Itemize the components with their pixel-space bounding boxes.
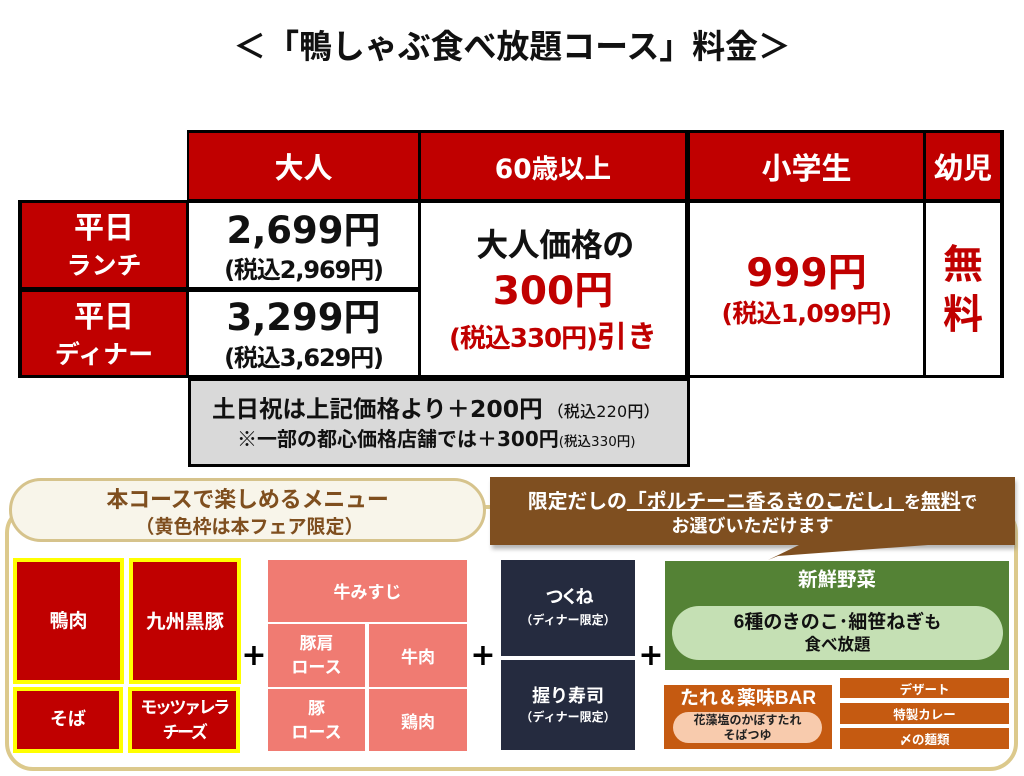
beef tendon: 牛みすじ — [334, 582, 402, 602]
row header: weekday lunch: 平日 — [74, 212, 134, 245]
mushroom pill — [672, 606, 1003, 660]
cell: elementary price: (税込1,099円) — [722, 299, 891, 328]
header: elementary: 小学生 — [762, 153, 852, 186]
tsukune: （ディナー限定） — [520, 613, 616, 627]
pork shoulder loin: ロース — [291, 658, 342, 677]
cell: senior discount — [421, 203, 685, 375]
cell: senior discount: 300円 — [493, 269, 613, 314]
duck meat: 鴨肉 — [49, 611, 88, 632]
cell: lunch price: (税込2,969円) — [224, 256, 383, 284]
header: infant: 幼児 — [934, 153, 992, 185]
menu heading pill — [9, 478, 486, 542]
cell: infant free: 無 — [943, 243, 983, 287]
pork loin: 豚 — [308, 698, 325, 718]
surcharge line: 土日祝は上記価格より＋200円 （税込220円） — [212, 395, 660, 423]
nigiri sushi — [501, 660, 635, 750]
row header: weekday dinner: ディナー — [55, 340, 153, 368]
mozzarella cheese: モッツァレラ — [140, 698, 228, 717]
mozzarella cheese: チーズ — [163, 723, 205, 742]
closing noodles: 〆の麺類 — [899, 733, 950, 747]
dessert: デザート — [899, 682, 950, 696]
cell: infant free — [926, 203, 1000, 375]
pork shoulder loin — [268, 624, 365, 687]
pork loin — [268, 689, 365, 751]
pork loin: ロース — [291, 722, 342, 742]
closing noodles — [840, 728, 1009, 749]
panel: menu frame — [5, 505, 1018, 771]
menu heading text: 本コースで楽しめるメニュー — [106, 487, 389, 512]
header: 60 and over: 60歳以上 — [495, 154, 611, 184]
sauce bar heading: たれ＆薬味BAR — [680, 688, 816, 709]
sauce bar pill: 花藻塩のかぼすたれ — [693, 713, 802, 727]
sauce bar panel — [664, 685, 832, 749]
nigiri sushi: （ディナー限定） — [520, 710, 616, 724]
special curry — [840, 703, 1009, 724]
salmon meats group — [268, 560, 467, 751]
cell: lunch price — [189, 203, 418, 287]
navy items group — [501, 560, 635, 750]
callout text: お選びいただけます — [672, 516, 834, 536]
duck meat — [13, 558, 124, 684]
row header: weekday dinner: 平日 — [74, 300, 134, 334]
yellow limited items — [13, 558, 241, 753]
special curry: 特製カレー — [893, 708, 956, 722]
callout text — [528, 490, 977, 536]
sauce bar pill — [673, 712, 822, 743]
plus sign 2: + — [470, 638, 496, 672]
title: ＜「鴨しゃぶ食べ放題コース」料金＞ — [233, 28, 791, 65]
pork shoulder loin: 豚肩 — [300, 634, 334, 653]
cell: infant free: 料 — [943, 293, 983, 337]
plus sign 1: + — [241, 638, 267, 672]
callout text: 限定だしの「ポルチーニ香るきのこだし」を無料で — [528, 491, 977, 513]
cell: senior discount: 大人価格の — [476, 227, 634, 263]
weekend surcharge note — [188, 378, 690, 467]
vegetables heading: 新鮮野菜 — [798, 569, 876, 591]
Kyushu black pork: 九州黒豚 — [146, 611, 224, 633]
beef — [369, 624, 467, 687]
header: infant — [926, 133, 1000, 199]
cell: dinner price: 3,299円 — [226, 296, 381, 339]
mushroom pill: 食べ放題 — [804, 636, 870, 654]
soba — [13, 687, 123, 753]
chicken — [369, 689, 467, 751]
cell: dinner price — [189, 292, 418, 375]
row header: weekday dinner — [22, 292, 186, 375]
beef: 牛肉 — [401, 648, 435, 667]
header: 60 and over — [421, 133, 685, 199]
header: adult — [189, 133, 418, 199]
cell: senior discount: (税込330円)引き — [449, 321, 657, 354]
row header: weekday lunch: ランチ — [66, 252, 142, 280]
plus sign 3: + — [638, 638, 664, 672]
callout: free dashi — [490, 477, 1018, 560]
cell: dinner price: (税込3,629円) — [224, 344, 383, 372]
dessert — [840, 678, 1009, 698]
tsukune — [501, 560, 635, 656]
menu heading subtext: （黄色枠は本フェア限定） — [135, 517, 364, 538]
table black backing: row headers — [18, 200, 190, 378]
row header: weekday lunch — [22, 203, 186, 287]
cell: elementary price — [690, 203, 923, 375]
soba: そば — [50, 708, 86, 728]
beef tendon — [268, 560, 467, 622]
fresh vegetables panel — [665, 561, 1009, 670]
cell: lunch price: 2,699円 — [226, 209, 381, 252]
nigiri sushi: 握り寿司 — [532, 686, 604, 706]
mozzarella cheese — [128, 687, 240, 753]
sauce bar pill: そばつゆ — [723, 728, 772, 742]
header: elementary — [690, 133, 923, 199]
header: adult: 大人 — [274, 153, 332, 185]
Kyushu black pork — [129, 558, 241, 684]
urban store note: ※一部の都心価格店舗では＋300円(税込330円) — [237, 427, 636, 451]
price table — [18, 130, 1004, 467]
mushroom pill: 6種のきのこ･細笹ねぎも — [734, 612, 941, 633]
cell: elementary price: 999円 — [746, 251, 867, 296]
tsukune: つくね — [546, 587, 590, 607]
chicken: 鶏肉 — [401, 712, 435, 732]
table black backing: header — [187, 130, 1004, 378]
